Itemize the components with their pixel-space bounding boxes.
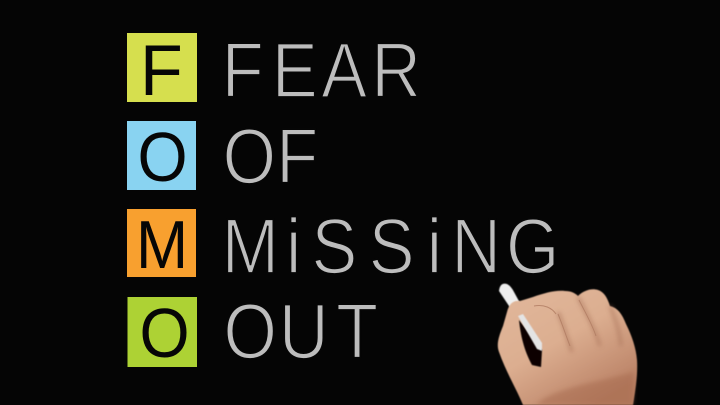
sticky note: O: O	[138, 119, 188, 197]
icon: hand holding chalk	[498, 284, 637, 405]
sticky note: O: O	[140, 295, 190, 373]
acronym row: M, Missing	[127, 202, 559, 290]
chalk word: OUT: OUT	[224, 287, 378, 375]
palm shadow	[536, 372, 634, 405]
hand	[498, 289, 637, 405]
sticky note: F	[127, 30, 197, 110]
chalk word: FEAR: FEAR	[222, 26, 421, 114]
chalk word: OF: OF	[223, 112, 318, 200]
sticky note: F: F	[140, 30, 183, 110]
sticky note: M: M	[136, 207, 188, 283]
black gap between thumb and fingers	[519, 320, 542, 367]
acronym row: F, Fear	[127, 26, 421, 114]
chalk stick tip	[499, 284, 520, 309]
acronym row: O, Out	[128, 287, 378, 375]
finger creases	[534, 300, 596, 346]
finger shading	[558, 297, 621, 352]
acronym row: O, Of	[127, 112, 318, 200]
chalk stick held in grip	[518, 314, 542, 351]
chalk word: MISSING: MiSSiNG	[222, 202, 559, 290]
